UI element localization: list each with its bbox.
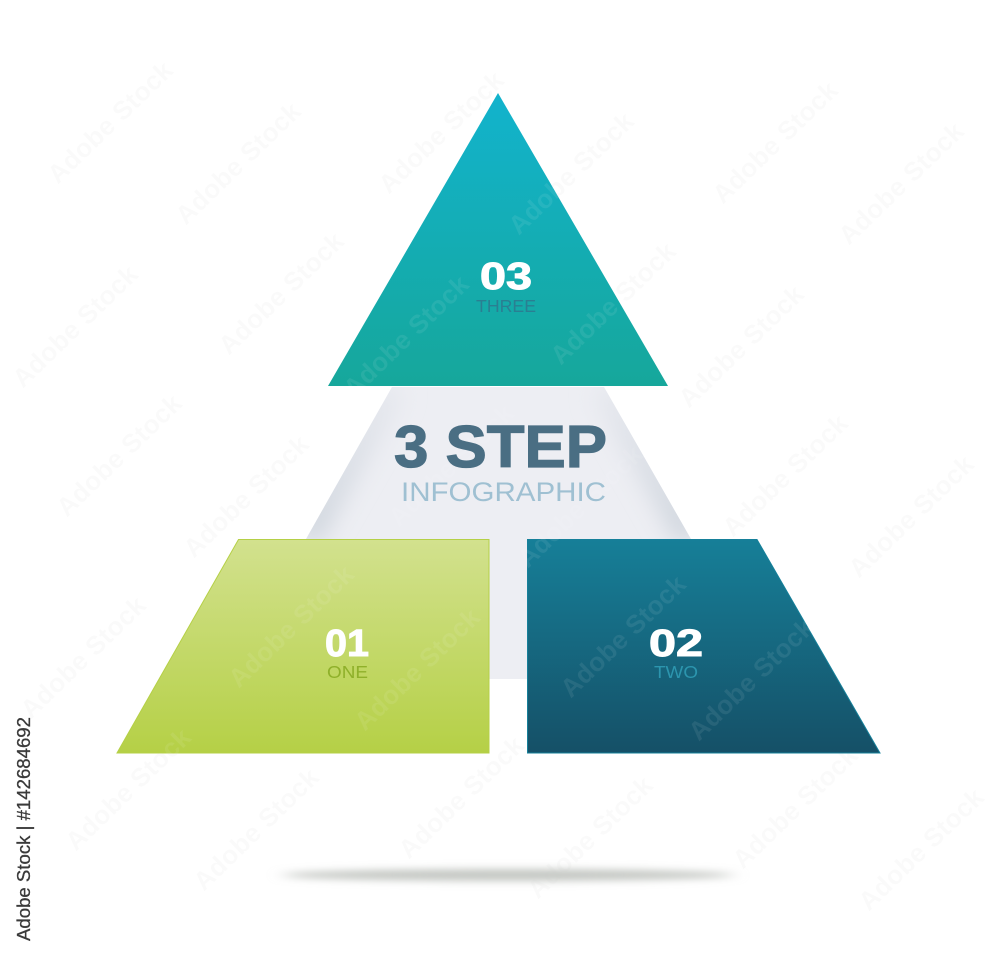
stock id text: Adobe Stock | #142684692: [14, 717, 34, 941]
foreground watermark on shapes: [59, 65, 820, 856]
panel: step 01 trapezoid: [117, 540, 489, 753]
foreground watermark on shapes: Adobe Stock: [59, 722, 197, 856]
background watermark: Adobe Stock: [14, 590, 152, 724]
floor shadow: [282, 869, 734, 881]
foreground watermark on shapes: Adobe Stock: [382, 398, 520, 532]
background watermark: Adobe Stock: [6, 259, 144, 393]
heading: 3 STEP: 3 STEP: [394, 414, 607, 480]
background watermark: Adobe Stock: [521, 770, 659, 904]
label: step 01: ONE: [327, 662, 368, 682]
background watermark: Adobe Stock: [392, 730, 530, 864]
label: step 02: 02: [649, 623, 703, 665]
panel: step 03 triangle: [328, 93, 668, 386]
foreground watermark on shapes: Adobe Stock: [502, 106, 640, 240]
background watermark: Adobe Stock: [706, 75, 844, 209]
background watermark: Adobe Stock: [41, 55, 179, 189]
background watermark: Adobe Stock: [852, 782, 990, 916]
background watermark: Adobe Stock: [169, 96, 307, 230]
foreground watermark on shapes: Adobe Stock: [511, 439, 649, 573]
background watermark: Adobe Stock: [716, 408, 854, 542]
background watermark: Adobe Stock: [59, 722, 197, 856]
background watermark: Adobe Stock: [842, 449, 980, 583]
foreground watermark on shapes: Adobe Stock: [554, 569, 692, 703]
background watermark: Adobe Stock: [832, 116, 970, 250]
background watermark: Adobe Stock: [726, 740, 864, 874]
background watermark: Adobe Stock: [50, 388, 188, 522]
background watermark: Adobe Stock: [372, 65, 510, 199]
background watermark: Adobe Stock: [544, 236, 682, 370]
foreground watermark on shapes: Adobe Stock: [372, 65, 510, 199]
foreground watermark on shapes: Adobe Stock: [177, 429, 315, 563]
foreground watermark on shapes: Adobe Stock: [222, 559, 360, 693]
foreground watermark on shapes: Adobe Stock: [348, 602, 486, 736]
background watermark: Adobe Stock: [187, 762, 325, 896]
background watermark: Adobe Stock: [502, 106, 640, 240]
label: step 03: [476, 256, 536, 316]
panel: central trapezoid background: [300, 380, 700, 680]
label: step 02: TWO: [654, 662, 698, 682]
foreground watermark on shapes: Adobe Stock: [682, 612, 820, 746]
background watermark: Adobe Stock: [177, 429, 315, 563]
label: step 02: [649, 623, 703, 682]
label: step 01: 01: [325, 623, 369, 665]
background watermark: Adobe Stock: [672, 279, 810, 413]
panel: step 02 trapezoid: [528, 540, 880, 753]
subheading: INFOGRAPHIC: INFOGRAPHIC: [401, 477, 606, 507]
background watermark: Adobe Stock: [212, 226, 350, 360]
foreground watermark on shapes: Adobe Stock: [337, 269, 475, 403]
label: step 03: 03: [480, 256, 532, 298]
label: step 03: THREE: [476, 296, 536, 316]
label: step 01: [325, 623, 369, 682]
foreground watermark on shapes: Adobe Stock: [544, 236, 682, 370]
